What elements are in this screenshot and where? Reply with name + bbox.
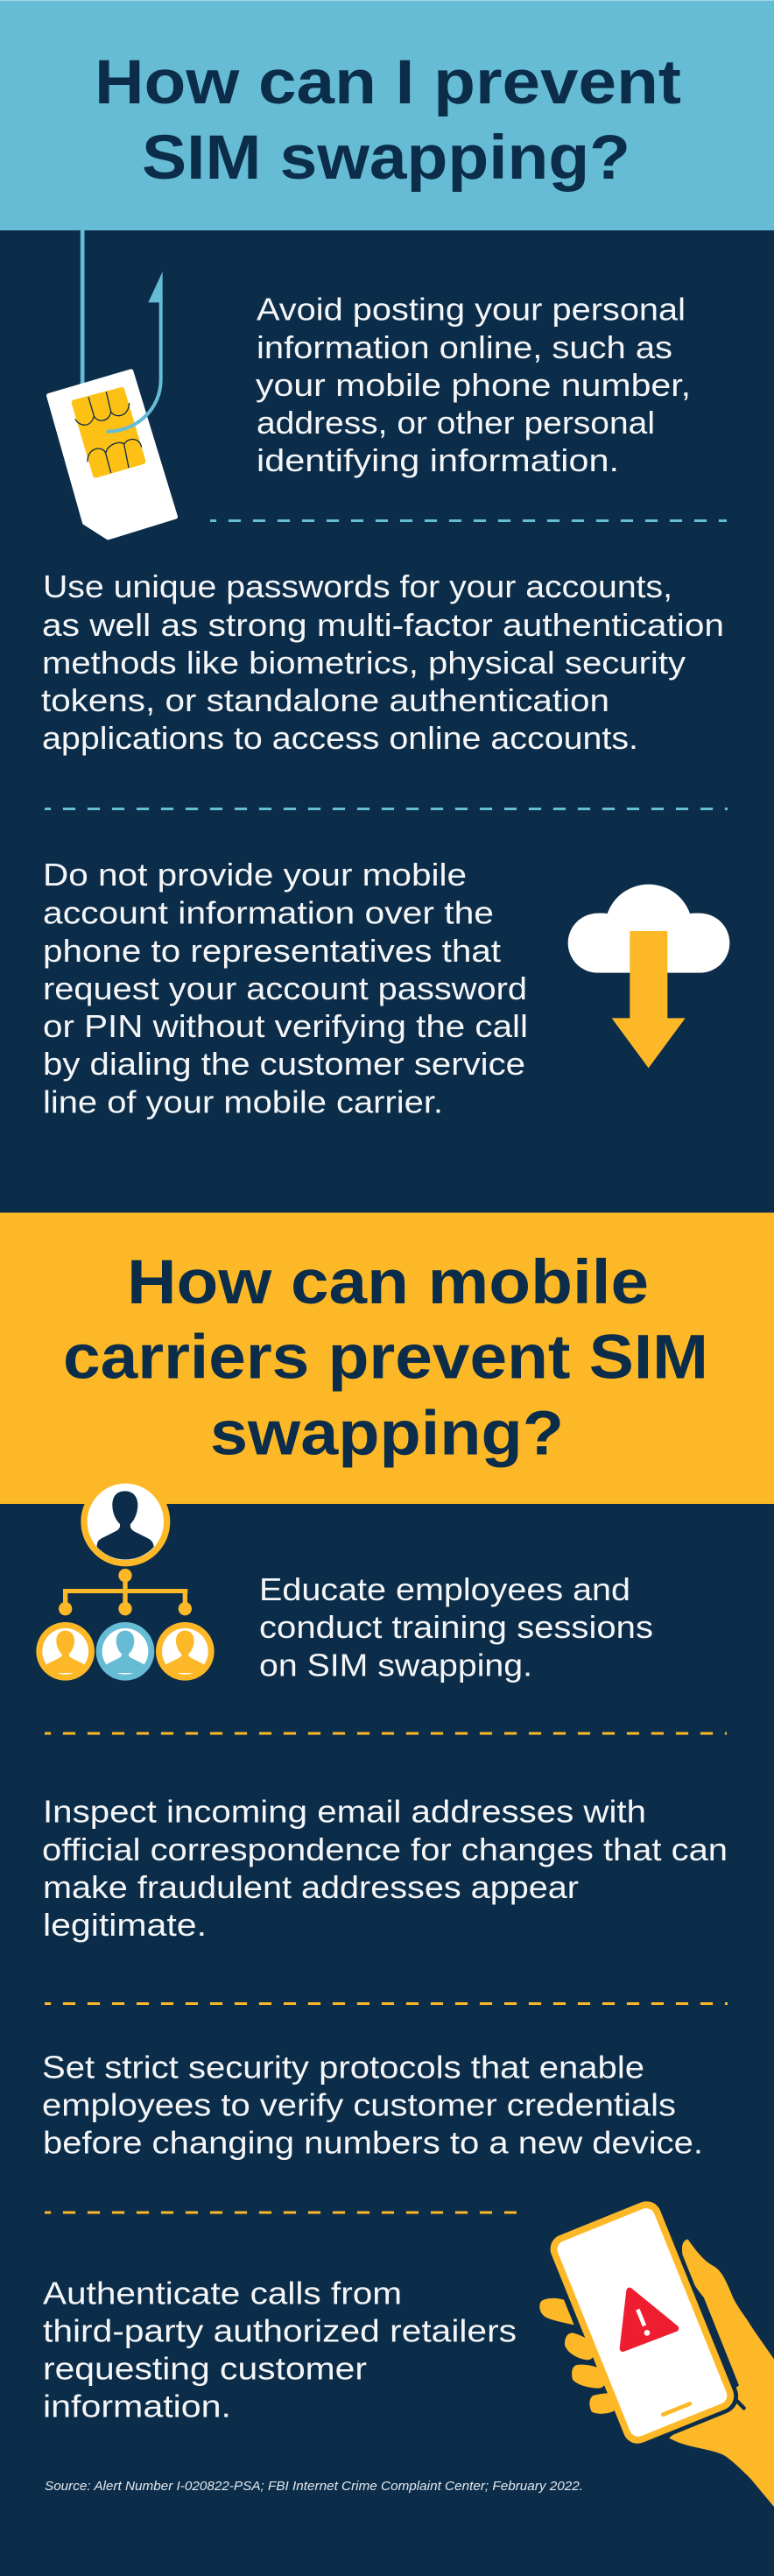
- title: how can I prevent SIM swapping: How can I prevent: [95, 48, 681, 117]
- text: do not provide account information: phone to representatives that: [43, 933, 501, 969]
- icon: SIM card on fishing hook: [49, 230, 175, 538]
- text: use unique passwords: applications to access online accounts.: [42, 720, 638, 756]
- text: do not provide account information: [43, 857, 528, 1119]
- text: set strict security protocols: employees to verify customer credentials: [42, 2086, 676, 2123]
- text: do not provide account information: account information over the: [43, 895, 494, 930]
- icon: organization chart of people: [36, 1477, 215, 1681]
- text: use unique passwords: [41, 568, 724, 756]
- source note: Source: Alert Number I-020822-PSA; FBI Internet Crime Complaint Center; February 2022.: [45, 2480, 583, 2494]
- text: authenticate calls: third-party authorized retailers: [43, 2312, 517, 2349]
- text: inspect incoming email addresses: Inspect incoming email addresses with: [43, 1794, 646, 1829]
- title: how can mobile carriers prevent SIM swapping: carriers prevent SIM: [63, 1323, 708, 1393]
- title: how can I prevent SIM swapping: [95, 48, 681, 193]
- text: use unique passwords: methods like biometrics, physical security: [42, 645, 686, 681]
- text: educate employees: on SIM swapping.: [259, 1647, 532, 1683]
- text: authenticate calls: information.: [43, 2388, 231, 2424]
- text: use unique passwords: Use unique passwords for your accounts,: [43, 568, 672, 604]
- text: inspect incoming email addresses: make fraudulent addresses appear: [43, 1869, 579, 1905]
- text: set strict security protocols: Set strict security protocols that enable: [42, 2050, 644, 2085]
- text: authenticate calls: [43, 2276, 517, 2424]
- title: how can mobile carriers prevent SIM swapping: How can mobile: [127, 1248, 649, 1317]
- icon: hand holding phone with alert: [539, 2191, 774, 2507]
- text: avoid posting personal information: Avoid posting your personal: [257, 291, 686, 328]
- text: educate employees: conduct training sessions: [259, 1609, 653, 1645]
- title: how can mobile carriers prevent SIM swapping: [63, 1248, 708, 1468]
- panel: carriers heading band: [0, 1212, 774, 1504]
- text: avoid posting personal information: identifying information.: [257, 442, 619, 478]
- text: inspect incoming email addresses: [42, 1794, 728, 1943]
- text: set strict security protocols: [42, 2050, 703, 2160]
- text: inspect incoming email addresses: legitimate.: [43, 1907, 207, 1943]
- text: educate employees: [259, 1571, 653, 1683]
- panel: top heading band: [0, 0, 774, 230]
- text: avoid posting personal information: [256, 291, 691, 478]
- text: do not provide account information: Do not provide your mobile: [43, 857, 467, 893]
- text: authenticate calls: requesting customer: [43, 2351, 367, 2386]
- text: avoid posting personal information: your mobile phone number,: [256, 367, 691, 403]
- text: inspect incoming email addresses: official correspondence for changes that can: [42, 1831, 728, 1867]
- text: do not provide account information: by dialing the customer service: [43, 1046, 525, 1082]
- text: educate employees: Educate employees and: [259, 1571, 630, 1607]
- text: use unique passwords: as well as strong multi-factor authentication: [42, 607, 724, 643]
- text: use unique passwords: tokens, or standalone authentication: [41, 682, 609, 718]
- text: do not provide account information: line of your mobile carrier.: [43, 1084, 443, 1119]
- icon: cloud with download arrow: [568, 885, 729, 1068]
- text: authenticate calls: Authenticate calls from: [43, 2276, 402, 2311]
- title: how can mobile carriers prevent SIM swapping: swapping?: [210, 1400, 564, 1468]
- text: avoid posting personal information: information online, such as: [257, 329, 672, 365]
- text: do not provide account information: request your account password: [43, 970, 527, 1006]
- text: avoid posting personal information: address, or other personal: [257, 405, 655, 441]
- text: set strict security protocols: before changing numbers to a new device.: [43, 2125, 703, 2160]
- text: do not provide account information: or PIN without verifying the call: [43, 1008, 528, 1044]
- title: how can I prevent SIM swapping: SIM swapping?: [142, 124, 630, 193]
